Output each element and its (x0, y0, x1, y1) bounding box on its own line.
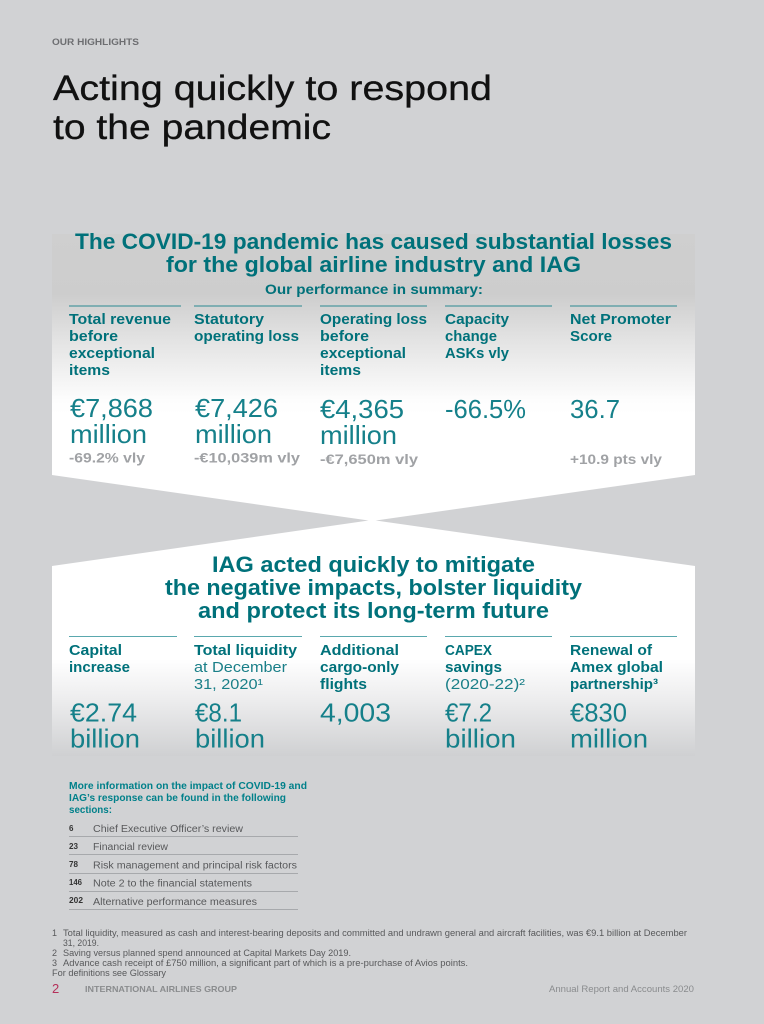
metric: capex savings: €7.2 (445, 698, 492, 728)
section reference table: Chief Executive Officer’s review (93, 824, 244, 835)
footnotes: 2 (52, 948, 57, 958)
subheading: Our performance in summary: (265, 281, 483, 297)
metric: statutory operating loss: €7,426 (195, 393, 278, 423)
metric: capacity change: -66.5% (445, 394, 526, 424)
section reference table: Alternative performance measures (93, 897, 257, 908)
metric: capacity change (445, 306, 552, 424)
metric: operating loss before exceptional items: exceptional (320, 346, 406, 362)
metric: additional cargo-only flights: flights (320, 677, 367, 693)
metric: amex partnership: €830 (570, 698, 627, 728)
section reference table: 202 (69, 896, 84, 905)
metric: amex partnership: Renewal of (570, 643, 652, 659)
section reference table: Note 2 to the financial statements (93, 878, 252, 890)
page number: 2 (52, 981, 59, 996)
metric: total revenue: €7,868 (70, 393, 153, 423)
metric: capex savings (445, 636, 552, 754)
section reference table (69, 824, 298, 910)
metric: statutory operating loss: million (195, 419, 272, 449)
metric: additional cargo-only flights: 4,003 (320, 698, 391, 728)
metric: operating loss before exceptional items: million (320, 420, 397, 450)
heading: response: IAG acted quickly to mitigate (212, 552, 535, 577)
metric: total liquidity: Total liquidity (194, 643, 297, 659)
footnotes: For definitions see Glossary (52, 968, 167, 978)
footnotes: 1 (52, 928, 57, 938)
heading: response: the negative impacts, bolster liquidity (165, 575, 583, 600)
section reference table: 78 (69, 860, 79, 869)
metric: capacity change: ASKs vly (445, 346, 509, 362)
metric: total revenue: exceptional (69, 346, 155, 362)
metric: statutory operating loss: -€10,039m vly (194, 450, 300, 466)
metric: operating loss before exceptional items: €4,365 (320, 394, 404, 424)
section reference table: 146 (69, 878, 83, 887)
title: to the pandemic (53, 108, 331, 147)
metric: capex savings: CAPEX (445, 643, 492, 659)
metric: statutory operating loss: Statutory (194, 312, 264, 328)
panel background: top arrow shape (52, 234, 695, 521)
metric: operating loss before exceptional items: -€7,650m vly (320, 451, 418, 467)
metric: total revenue: million (70, 419, 147, 449)
footnotes: Total liquidity, measured as cash and interest-bearing deposits and committed and undrawn general and aircraft facilities, was €9.1 billion at December (63, 928, 687, 938)
metric: capital increase: billion (70, 724, 140, 754)
metric: amex partnership: partnership³ (570, 677, 658, 693)
metric: operating loss before exceptional items (320, 306, 427, 467)
section reference table: 6 (69, 824, 74, 833)
metric: capex savings: savings (445, 660, 502, 676)
section reference table: Risk management and principal risk factors (93, 860, 297, 872)
metric: net promoter score (570, 306, 677, 467)
more information intro: More information on the impact of COVID-19 and (69, 780, 307, 792)
section reference table: 23 (69, 842, 79, 851)
panel background: bottom arrow shape (52, 520, 695, 756)
metric: statutory operating loss (194, 306, 302, 466)
footnotes: Saving versus planned spend announced at Capital Markets Day 2019. (63, 948, 351, 958)
metric: capital increase: increase (69, 660, 130, 676)
metric: total liquidity (194, 636, 302, 754)
metric: amex partnership: million (570, 724, 648, 754)
metric: net promoter score: Net Promoter (570, 312, 671, 328)
footnotes: 31, 2019. (63, 938, 99, 948)
metric: statutory operating loss: operating loss (194, 329, 299, 345)
metric: operating loss before exceptional items: items (320, 363, 361, 379)
metric: capital increase: €2.74 (70, 698, 137, 728)
footer report title: Annual Report and Accounts 2020 (549, 984, 694, 995)
section reference table: Financial review (93, 842, 169, 853)
metric: capital increase: Capital (69, 643, 122, 659)
footer organisation name: INTERNATIONAL AIRLINES GROUP (85, 984, 237, 994)
heading: response (165, 552, 583, 623)
metric: capacity change: Capacity (445, 312, 509, 328)
more information intro (69, 780, 307, 816)
metric: capital increase (69, 636, 177, 754)
footnotes: 3 (52, 958, 57, 968)
metric: amex partnership (570, 636, 677, 754)
metric: net promoter score: +10.9 pts vly (570, 451, 662, 467)
metric: capacity change: change (445, 329, 497, 345)
metric: additional cargo-only flights (320, 636, 427, 728)
footnotes (52, 928, 687, 978)
metric: operating loss before exceptional items: Operating loss (320, 312, 427, 328)
metric: capex savings: (2020-22)² (445, 677, 525, 693)
metric: net promoter score: 36.7 (570, 394, 620, 424)
metric: total revenue: Total revenue (69, 312, 171, 328)
metric: total revenue: before (69, 329, 118, 345)
heading: losses (75, 229, 672, 277)
heading: response: and protect its long-term future (198, 598, 549, 623)
metric: capex savings: billion (445, 724, 516, 754)
metric: total revenue (69, 306, 181, 466)
title: Acting quickly to respond (53, 69, 492, 108)
panel: losses (52, 229, 695, 521)
metric: amex partnership: Amex global (570, 660, 663, 676)
metric: operating loss before exceptional items: before (320, 329, 369, 345)
metric: additional cargo-only flights: cargo-only (320, 660, 399, 676)
panel: response (52, 520, 695, 756)
more information intro: sections: (69, 804, 112, 816)
title (53, 69, 492, 147)
heading: losses: The COVID-19 pandemic has caused substantial losses (75, 229, 672, 254)
metric: total liquidity: €8.1 (195, 698, 242, 728)
metric: total liquidity: at December (194, 660, 287, 676)
section label: OUR HIGHLIGHTS (52, 37, 139, 48)
metric: total revenue: -69.2% vly (69, 450, 145, 466)
metric: additional cargo-only flights: Additional (320, 643, 399, 659)
metric: net promoter score: Score (570, 329, 612, 345)
metric: total revenue: items (69, 363, 110, 379)
metric: total liquidity: 31, 2020¹ (194, 677, 263, 693)
footnotes: Advance cash receipt of £750 million, a significant part of which is a pre-purchase of Avios points. (63, 958, 468, 968)
heading: losses: for the global airline industry and IAG (166, 252, 581, 277)
metric: total liquidity: billion (195, 724, 265, 754)
more information intro: IAG’s response can be found in the following (69, 792, 286, 804)
